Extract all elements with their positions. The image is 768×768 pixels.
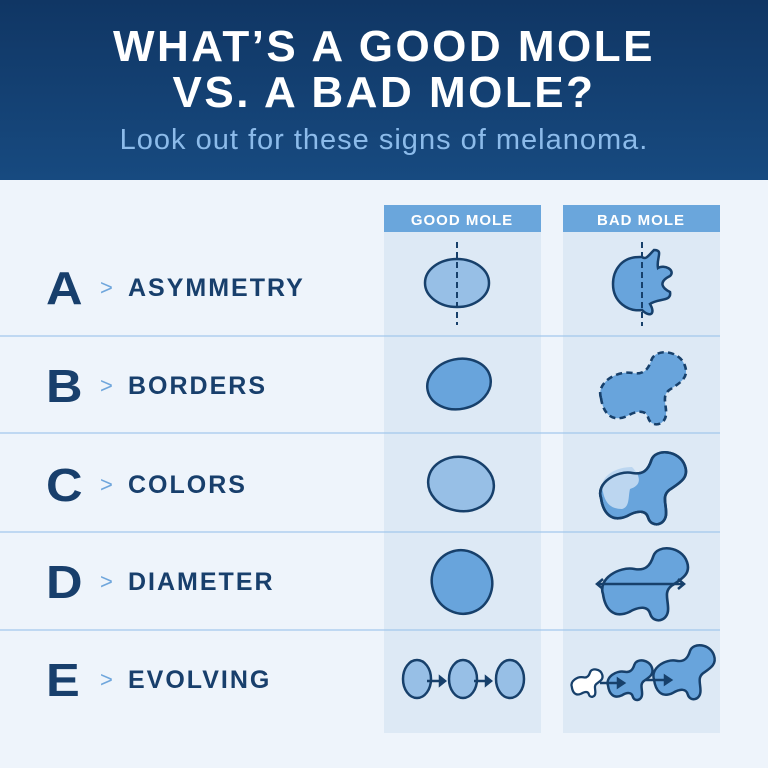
column header: bad mole [563, 205, 720, 232]
row C label: > [100, 472, 113, 497]
title [113, 22, 655, 117]
row A label: ASYMMETRY [128, 274, 305, 302]
good A [425, 242, 489, 325]
column header: good mole [384, 205, 541, 232]
row A label: A [46, 262, 83, 314]
row B label: > [100, 373, 113, 398]
bad A [613, 242, 672, 326]
title: WHAT’S A GOOD MOLE [113, 22, 655, 71]
good E [403, 660, 524, 698]
row E label: EVOLVING [128, 666, 271, 694]
row C label [46, 459, 247, 511]
bad E [572, 645, 715, 700]
good D [423, 542, 501, 622]
good B [423, 353, 495, 415]
good C [424, 452, 498, 516]
row A label: > [100, 275, 113, 300]
row E label: E [46, 654, 80, 706]
row E label [46, 654, 271, 706]
row B label: BORDERS [128, 372, 267, 400]
row C label: C [46, 459, 83, 511]
row A label [46, 262, 305, 314]
column header: bad mole: BAD MOLE [597, 212, 685, 229]
bad C [600, 452, 686, 524]
row D label: D [46, 556, 83, 608]
bad B [600, 352, 686, 424]
row C label: COLORS [128, 471, 247, 499]
header banner [0, 0, 768, 180]
subtitle: Look out for these signs of melanoma. [120, 124, 648, 156]
row B label [46, 360, 267, 412]
column header: good mole: GOOD MOLE [411, 212, 513, 229]
row B label: B [46, 360, 83, 412]
bad D [597, 548, 688, 620]
row E label: > [100, 667, 113, 692]
row D label: > [100, 569, 113, 594]
row D label: DIAMETER [128, 568, 275, 596]
title: VS. A BAD MOLE? [173, 68, 595, 117]
row D label [46, 556, 275, 608]
